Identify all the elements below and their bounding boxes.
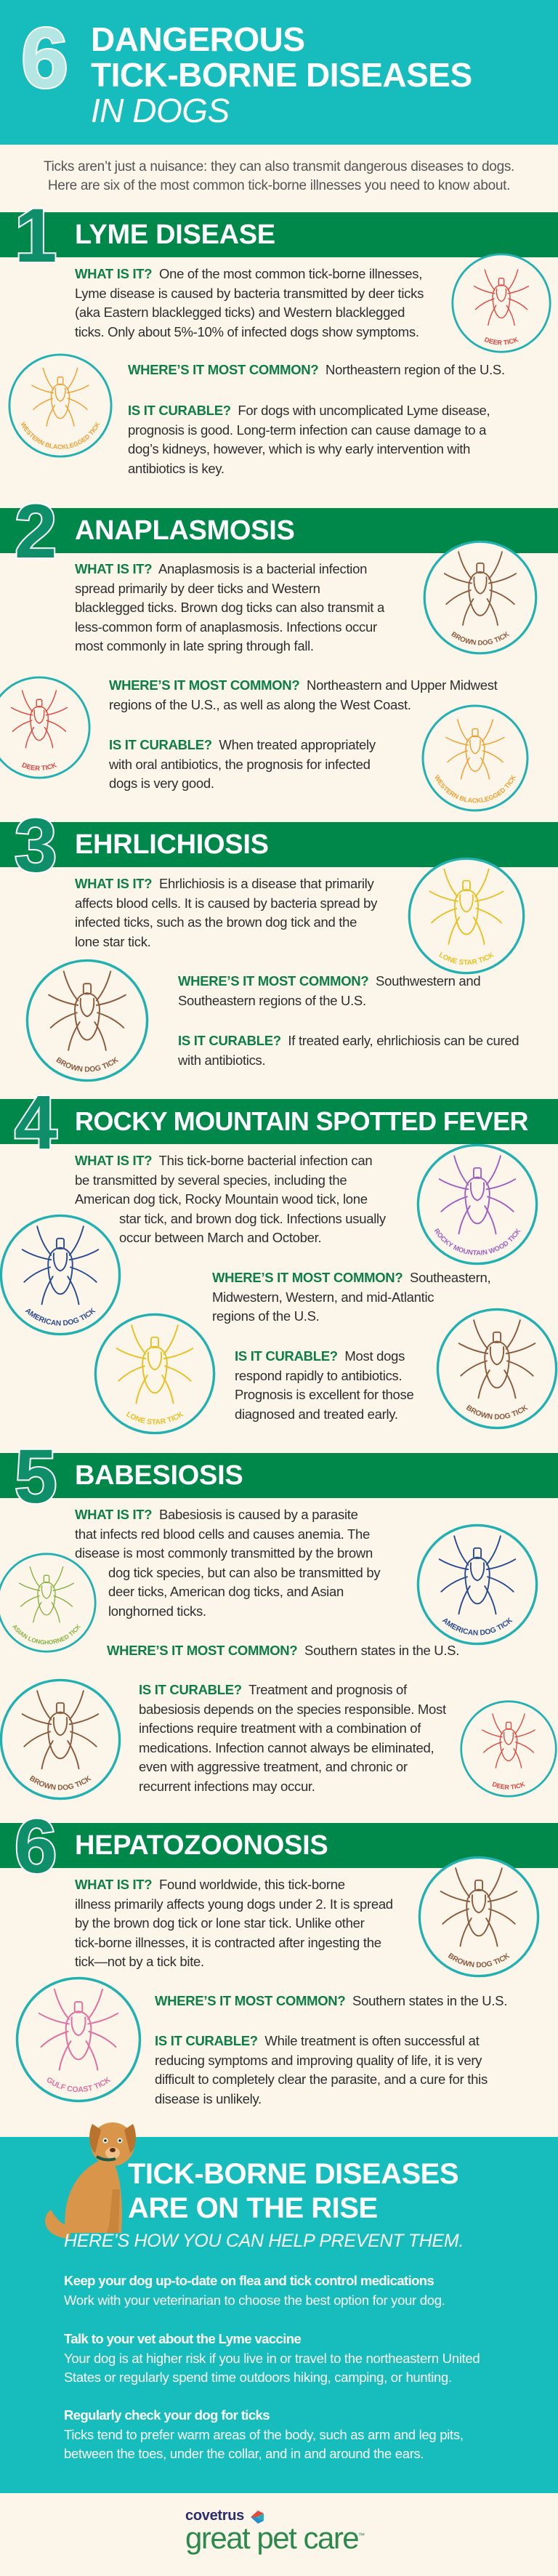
text: hepatozoonosis curable [155,2033,488,2106]
number 5: 5 [15,1434,57,1519]
text: babesiosis what: dog tick species, but can also be transmitted by [108,1564,380,1580]
icon: deer tick: DEER TICK [22,762,57,770]
section 1 bar [0,212,558,257]
text: rmsf where: regions of the U.S. [212,1308,320,1324]
text: babesiosis what: longhorned ticks. [108,1603,206,1618]
text: babesiosis what: that infects red blood cells and causes anemia. The [75,1526,370,1541]
tip 1: Work with your veterinarian to choose the best option for your dog. [64,2293,445,2307]
text: rmsf what: American dog tick, Rocky Mountain wood tick, lone [75,1191,368,1207]
text: lyme what [75,266,424,339]
text: lyme what: WHAT IS IT? One of the most common tick-borne illnesses, [75,266,422,281]
text: rmsf what: occur between March and October. [119,1230,321,1245]
section 2 bar: ANAPLASMOSIS [75,515,295,546]
text: anaplasmosis curable [109,737,376,791]
text: hepatozoonosis what: WHAT IS IT? Found worldwide, this tick-borne [75,1877,345,1892]
text: ehrlichiosis where [178,973,480,1008]
text: rmsf what: WHAT IS IT? This tick-borne bacterial infection can [75,1153,372,1168]
icon: brown dog tick [423,541,538,654]
section 3 bar [0,822,558,867]
text: babesiosis where: WHERE’S IT MOST COMMON? Southern states in the U.S. [107,1643,459,1658]
text: babesiosis curable: infections require treatment with a combination of [139,1720,421,1736]
text: hepatozoonosis what: by the brown dog tick or lone star tick. Unlike other [75,1915,365,1931]
tip 3: Regularly check your dog for ticks [64,2407,270,2423]
heading: on the rise [128,2158,458,2224]
text: rmsf curable: respond rapidly to antibiotics. [235,1368,402,1382]
tip 2 [64,2330,480,2387]
text: babesiosis curable: IS IT CURABLE? Treatment and prognosis of [139,1682,407,1697]
text: ehrlichiosis what [75,876,378,949]
icon: rocky mountain wood tick [417,1144,538,1265]
icon: rocky mountain wood tick: ROCKY MOUNTAIN WOOD TICK [434,1228,521,1255]
text: anaplasmosis what [75,561,385,653]
icon: lone star tick [408,858,525,974]
text: babesiosis curable: babesiosis depends on the species responsible. Most [139,1701,446,1717]
tip 3: between the toes, under the collar, and in and around the ears. [64,2446,424,2461]
intro text: Ticks aren’t just a nuisance: they can also transmit dangerous diseases to dogs. [44,159,514,174]
text: hepatozoonosis curable: difficult to completely clear the parasite, and a cure for this [155,2072,488,2087]
text: anaplasmosis what: blacklegged ticks. Brown dog ticks can also transmit a [75,600,384,615]
number 6: 6 [15,1804,57,1889]
text: babesiosis what: disease is most commonly transmitted by the brown [75,1545,373,1561]
icon: deer tick: DEER TICK [493,1782,525,1790]
text: hepatozoonosis curable: IS IT CURABLE? While treatment is often successful at [155,2033,479,2048]
text: lyme what: Lyme disease is caused by bacteria transmitted by deer ticks [75,285,424,301]
text: ehrlichiosis what: affects blood cells. It is caused by bacteria spread by [75,895,377,910]
text: rmsf curable: Prognosis is excellent for those [235,1387,413,1402]
icon: dog [45,2122,136,2239]
icon: lone star tick [94,1313,215,1435]
title: DANGEROUS [91,20,305,58]
icon: american dog tick [417,1524,538,1646]
header number 6: 6 [21,10,68,105]
text: lyme curable: dog’s kidneys, however, which is why early intervention with [128,441,470,456]
icon: lone star tick: LONE STAR TICK [439,952,494,965]
section 6 bar: HEPATOZOONOSIS [75,1830,328,1861]
icon: deer tick [460,1700,557,1798]
icon: brown dog tick [26,959,148,1082]
icon: lone star tick: LONE STAR TICK [126,1412,184,1425]
text: lyme curable [128,403,490,476]
text: anaplasmosis where: regions of the U.S., as well as along the West Coast. [109,696,411,712]
text: babesiosis what [75,1507,381,1619]
tip 2: States or regularly spend time outdoors hiking, camping, or hunting. [64,2370,452,2385]
section 6 bar [0,1823,558,1868]
text: ehrlichiosis curable: IS IT CURABLE? If treated early, ehrlichiosis can be cured [178,1033,519,1048]
icon: western blacklegged tick: WESTERN BLACKLEGGED TICK [21,422,100,449]
icon: western blacklegged tick [8,353,113,458]
icon: gulf coast tick: GULF COAST TICK [46,2077,110,2092]
icon: brown dog tick: BROWN DOG TICK [451,631,510,645]
logo: covetrus [185,2508,244,2524]
tip 1 [64,2273,445,2308]
tip 1: Keep your dog up-to-date on flea and tick control medications [64,2273,434,2288]
text: hepatozoonosis where: WHERE’S IT MOST COMMON? Southern states in the U.S. [155,1993,507,2008]
text: rmsf curable [235,1348,413,1422]
text: ehrlichiosis where: Southeastern regions of the U.S. [178,993,366,1007]
text: anaplasmosis what: spread primarily by deer ticks and Western [75,580,320,596]
number 2: 2 [15,489,57,574]
text: babesiosis what: deer ticks, American dog ticks, and Asian [108,1584,344,1599]
logo [185,2508,381,2566]
icon: american dog tick: AMERICAN DOG TICK [25,1308,96,1326]
icon: western blacklegged tick: WESTERN BLACKLEGGED TICK [434,775,516,802]
text: anaplasmosis where [109,677,498,712]
heading: on the rise: TICK-BORNE DISEASES [128,2158,458,2190]
tip 3 [64,2406,464,2464]
intro text [44,159,514,193]
header banner [0,0,558,145]
icon: gulf coast tick [16,1977,141,2102]
title: IN DOGS [91,92,230,129]
text: ehrlichiosis where: WHERE’S IT MOST COMMON? Southwestern and [178,973,480,989]
text: babesiosis curable: recurrent infections may occur. [139,1778,315,1794]
section 4 bar [0,1099,558,1144]
text: anaplasmosis where: WHERE’S IT MOST COMMON? Northeastern and Upper Midwest [109,677,498,693]
text: lyme curable: prognosis is good. Long-term infection can cause damage to a [128,422,486,438]
text: lyme what: ticks. Only about 5%-10% of infected dogs show symptoms. [75,324,419,339]
section 4 bar: ROCKY MOUNTAIN SPOTTED FEVER [75,1106,528,1136]
text: rmsf curable: diagnosed and treated early. [235,1406,398,1422]
panel: prevention [0,2137,558,2493]
icon: western blacklegged tick [421,705,529,811]
section 2 bar [0,508,558,553]
text: babesiosis what: WHAT IS IT? Babesiosis is caused by a parasite [75,1507,358,1522]
text: ehrlichiosis curable: with antibiotics. [178,1052,265,1067]
section 5 bar [0,1453,558,1498]
text: anaplasmosis what: WHAT IS IT? Anaplasmosis is a bacterial infection [75,561,367,576]
text: ehrlichiosis what: infected ticks, such as the brown dog tick and the [75,914,357,930]
number 1: 1 [15,193,57,278]
icon: brown dog tick: BROWN DOG TICK [56,1057,119,1071]
tip 2: Your dog is at higher risk if you live in or travel to the northeastern United [64,2351,480,2365]
number 3: 3 [15,803,57,888]
icon: american dog tick: AMERICAN DOG TICK [442,1617,513,1635]
tip 2: Talk to your vet about the Lyme vaccine [64,2331,301,2346]
text: ehrlichiosis what: lone star tick. [75,933,151,949]
icon: american dog tick [0,1214,121,1336]
number 4: 4 [15,1080,57,1165]
text: anaplasmosis curable: with oral antibiotics, the prognosis for infected [109,756,371,772]
text: lyme curable: antibiotics is key. [128,461,225,475]
text: rmsf what: star tick, and brown dog tick. Infections usually [119,1211,386,1225]
icon: deer tick [0,676,91,779]
icon: deer tick [451,253,551,353]
text: rmsf where [212,1270,490,1324]
text: rmsf curable: IS IT CURABLE? Most dogs [235,1348,405,1364]
logo: great pet care™ [185,2521,364,2555]
tip 3: Ticks tend to prefer warm areas of the body, such as arm and leg pits, [64,2426,464,2442]
icon: brown dog tick [418,1856,539,1977]
text: hepatozoonosis what: tick—not by a tick bite. [75,1954,204,1969]
icon: brown dog tick: BROWN DOG TICK [466,1404,528,1419]
icon: asian longhorned tick: ASIAN LONGHORNED TICK [12,1624,81,1644]
icon: asian longhorned tick [0,1553,97,1653]
text: ehrlichiosis what: WHAT IS IT? Ehrlichiosis is a disease that primarily [75,876,373,891]
icon: brown dog tick: BROWN DOG TICK [29,1775,92,1790]
icon: brown dog tick: BROWN DOG TICK [448,1952,510,1967]
subheading: HERE’S HOW YOU CAN HELP PREVENT THEM. [64,2231,464,2251]
text: ehrlichiosis curable [178,1033,519,1067]
text: lyme what: (aka Eastern blacklegged ticks) and Western blacklegged [75,305,405,320]
text: anaplasmosis what: less-common form of anaplasmosis. Infections occur [75,619,377,634]
text: rmsf what [75,1153,386,1245]
heading: on the rise: ARE ON THE RISE [128,2192,378,2224]
title [91,20,472,129]
section 5 bar: BABESIOSIS [75,1460,243,1491]
text: rmsf where: Midwestern, Western, and mid-Atlantic [212,1289,434,1304]
text: babesiosis curable: even with aggressive treatment, and chronic or [139,1759,408,1774]
text: hepatozoonosis what: illness primarily affects young dogs under 2. It is spread [75,1896,393,1912]
text: anaplasmosis curable: dogs is very good. [109,776,214,791]
text: lyme curable: IS IT CURABLE? For dogs with uncomplicated Lyme disease, [128,403,490,418]
text: lyme where: WHERE’S IT MOST COMMON? Northeastern region of the U.S. [128,362,505,377]
text: hepatozoonosis curable: reducing symptoms and improving quality of life, it is very [155,2053,482,2067]
icon: brown dog tick [0,1679,121,1800]
icon: logo mark [249,2509,265,2525]
text: hepatozoonosis what: tick-borne illnesses, it is contracted after ingesting the [75,1935,381,1949]
text: rmsf where: WHERE’S IT MOST COMMON? Southeastern, [212,1270,490,1285]
text: hepatozoonosis curable: disease is unlikely. [155,2090,262,2106]
intro text: Here are six of the most common tick-borne illnesses you need to know about. [48,178,510,193]
text: anaplasmosis curable: IS IT CURABLE? When treated appropriately [109,737,376,752]
title: TICK-BORNE DISEASES [91,56,472,94]
icon: brown dog tick [436,1308,558,1429]
section 1 bar: LYME DISEASE [75,220,275,250]
text: babesiosis curable [139,1682,446,1794]
icon: deer tick: DEER TICK [484,337,519,345]
section 3 bar: EHRLICHIOSIS [75,829,269,860]
text: rmsf what: be transmitted by several species, including the [75,1172,347,1188]
text: babesiosis curable: medications. Infection cannot always be eliminated, [139,1740,434,1755]
text: anaplasmosis what: most commonly in late spring through fall. [75,638,314,653]
text: hepatozoonosis what [75,1877,393,1969]
